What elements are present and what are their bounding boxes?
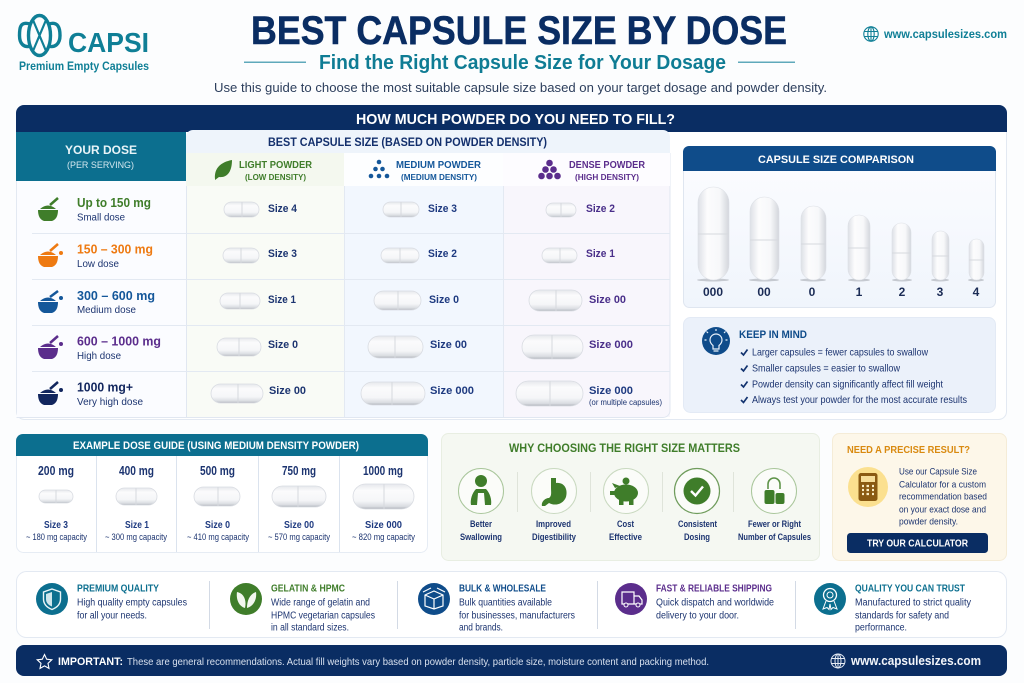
icon: leaf (215, 160, 232, 180)
row: 600-1000 mg: 600 – 1000 mg (77, 334, 161, 348)
example: 400 mg: Size 1 (125, 519, 149, 531)
panel: keep in mind: KEEP IN MIND (739, 329, 807, 341)
icon: bowl blue (38, 291, 63, 313)
panel: benefits (16, 572, 1006, 638)
footer bar: important note: www.capsulesizes.com (850, 654, 981, 668)
capsule (223, 248, 259, 263)
benefit: bulk and wholesale: BULK & WHOLESALE (459, 584, 546, 594)
reason: improved digestibility: Digestibility (532, 532, 576, 542)
reason: consistent dosing: Dosing (684, 532, 710, 542)
icon: bowl green (38, 198, 58, 221)
row: 300-600 mg: 300 – 600 mg (77, 289, 155, 303)
logo: CAPSI (19, 16, 149, 73)
column: medium powder: MEDIUM POWDER (396, 160, 482, 171)
reason: better swallowing (458, 468, 504, 542)
example: 750 mg: Size 00 (284, 519, 314, 531)
row: 600-1000 mg: Size 000 (589, 339, 633, 351)
reason: better swallowing: Swallowing (460, 532, 502, 542)
row: 150-300 mg: Size 2 (428, 248, 457, 260)
icon: stomach (542, 478, 567, 506)
comparison size labels: 3 (937, 285, 944, 299)
panel: need a precise result (832, 434, 1006, 560)
column: light powder (186, 153, 344, 186)
benefit: premium quality: High quality empty capsules (77, 598, 187, 608)
row: 1000 mg+ (38, 380, 662, 408)
capsule (516, 381, 583, 406)
calculator text: recommendation based (899, 492, 987, 502)
icon: leaves (230, 583, 262, 615)
footer bar: important note (16, 645, 1007, 676)
reason: cost effective: Effective (609, 532, 642, 542)
capsule (361, 382, 425, 405)
example: 200 mg: Size 3 (44, 519, 68, 531)
vertical capsules (697, 187, 984, 282)
icon: bottles (764, 478, 784, 504)
checklist: Larger capsules = fewer capsules to swallow (752, 348, 929, 358)
icon: shield (36, 583, 68, 615)
row: up to 150 mg: Size 2 (586, 203, 615, 215)
benefit: bulk and wholesale: for businesses, manufacturers (459, 610, 575, 622)
capsule (529, 290, 582, 311)
row: up to 150 mg: Up to 150 mg (77, 196, 151, 210)
capsule (522, 335, 583, 359)
footer bar: important note: IMPORTANT: (58, 656, 123, 668)
checklist: Smaller capsules = easier to swallow (752, 364, 901, 374)
reason: right number of capsules: Fewer or Right (748, 519, 801, 529)
calculator text: Calculator for a custom (899, 480, 986, 490)
icon: light bulb (702, 327, 730, 355)
example: 1000 mg: Size 000 (365, 519, 402, 531)
benefit: premium quality (36, 583, 187, 622)
example: 400 mg: 400 mg (119, 464, 154, 478)
benefit: premium quality: for all your needs. (77, 610, 147, 622)
reason: better swallowing: Better (470, 519, 492, 529)
main header (16, 105, 1007, 132)
panel: keep in mind (684, 318, 996, 412)
checklist: Powder density can significantly affect fill weight (752, 380, 943, 390)
row: 300-600 mg (38, 289, 626, 316)
example: 400 mg (105, 464, 167, 542)
button: try our calculator: TRY OUR CALCULATOR (867, 538, 969, 550)
example: 750 mg: 750 mg (282, 464, 316, 478)
example: 200 mg: ~ 180 mg capacity (26, 532, 87, 542)
comparison size labels (703, 285, 980, 299)
row: 1000 mg+: Size 000 (589, 385, 633, 397)
benefit: bulk and wholesale: and brands. (459, 622, 503, 634)
row: 150-300 mg: Size 1 (586, 248, 615, 260)
comparison size labels: 1 (856, 285, 863, 299)
column: light powder: (LOW DENSITY) (245, 172, 306, 182)
icon: bowl purple (38, 336, 63, 359)
benefit: premium quality: PREMIUM QUALITY (77, 584, 159, 594)
row: 150-300 mg: Low dose (77, 259, 119, 270)
row: up to 150 mg: Size 3 (428, 203, 457, 215)
benefit: quality you can trust: standards for safety and (855, 610, 949, 622)
capsule (220, 293, 260, 309)
capsule (383, 202, 419, 217)
your dose heading: YOUR DOSE (65, 143, 137, 157)
row: 600-1000 mg: Size 00 (430, 339, 467, 351)
example: 750 mg: ~ 570 mg capacity (268, 532, 330, 542)
capsule (374, 291, 421, 310)
reason: cost effective: Cost (617, 519, 634, 529)
benefit: quality you can trust: performance. (855, 622, 907, 634)
example: 200 mg (26, 464, 87, 542)
comparison heading (683, 146, 996, 171)
panel: need a precise result: NEED A PRECISE RESULT? (847, 444, 970, 456)
icon: bowl navy (38, 382, 63, 405)
your dose heading (16, 132, 186, 181)
button: try our calculator (847, 533, 988, 553)
benefit: quality you can trust: QUALITY YOU CAN TRUST (855, 584, 965, 594)
column: medium powder (344, 153, 503, 186)
panel: capsule size comparison (683, 146, 996, 308)
example: 1000 mg: ~ 820 mg capacity (352, 532, 415, 542)
calculator text: powder density. (899, 516, 958, 528)
icon: check badge (684, 478, 710, 504)
footer bar: important note: These are general recommendations. Actual fill weights vary based on powder density, particle size, moisture content and packing method. (127, 657, 709, 668)
panel: why choosing the right size matters: WHY CHOOSING THE RIGHT SIZE MATTERS (509, 441, 740, 455)
row: 1000 mg+: Very high dose (77, 397, 143, 408)
your dose heading: (PER SERVING) (67, 160, 134, 171)
website link top: www.capsulesizes.com (883, 29, 1007, 41)
best capsule heading: BEST CAPSULE SIZE (BASED ON POWDER DENSITY) (268, 137, 547, 149)
reason: improved digestibility: Improved (536, 519, 571, 529)
checklist (741, 348, 967, 406)
intro text: Use this guide to choose the most suitable capsule size based on your target dosage and powder density. (214, 80, 827, 95)
comparison heading: CAPSULE SIZE COMPARISON (758, 154, 914, 166)
main header: HOW MUCH POWDER DO YOU NEED TO FILL? (356, 111, 675, 128)
example: 500 mg: ~ 410 mg capacity (187, 532, 249, 542)
row: 1000 mg+: (or multiple capsules) (589, 398, 662, 407)
example: 200 mg: 200 mg (38, 464, 74, 478)
capsule (368, 336, 423, 358)
example: 750 mg (268, 464, 330, 542)
example: 1000 mg (352, 464, 415, 542)
benefit: bulk and wholesale: Bulk quantities available (459, 598, 552, 608)
capsule (217, 338, 261, 356)
row: 300-600 mg: Size 1 (268, 294, 296, 306)
reason: consistent dosing (674, 468, 720, 542)
capsule (546, 203, 576, 217)
calculator text (899, 466, 987, 528)
icon: truck (615, 583, 647, 615)
subtitle: Find the Right Capsule Size for Your Dosage (319, 52, 726, 74)
column: medium powder: (MEDIUM DENSITY) (401, 172, 477, 182)
icon: star (37, 654, 52, 668)
comparison size labels: 0 (809, 285, 816, 299)
comparison size labels: 4 (973, 285, 980, 299)
dose table (16, 130, 670, 418)
row: 150-300 mg: Size 3 (268, 248, 297, 260)
example heading: EXAMPLE DOSE GUIDE (USING MEDIUM DENSITY POWDER) (73, 440, 359, 452)
icon: bowl orange (38, 244, 63, 267)
row: 1000 mg+: Size 00 (269, 385, 306, 397)
benefit: quality you can trust: Manufactured to strict quality (855, 598, 971, 608)
column: dense powder: DENSE POWDER (569, 160, 646, 171)
benefit: fast shipping: delivery to your door. (656, 610, 739, 622)
benefit: gelatin and hpmc: Wide range of gelatin and (271, 598, 370, 608)
column: dense powder: (HIGH DENSITY) (575, 172, 639, 182)
row: 150-300 mg (38, 242, 615, 270)
logo: CAPSI: Premium Empty Capsules (19, 61, 149, 73)
benefit: gelatin and hpmc: HPMC vegetarian capsules (271, 610, 375, 622)
example: 500 mg (187, 464, 249, 542)
row: up to 150 mg: Small dose (77, 212, 125, 224)
column: dense powder (503, 153, 670, 186)
example: 400 mg: ~ 300 mg capacity (105, 532, 167, 542)
capsule (542, 248, 577, 263)
icon: globe (831, 654, 845, 668)
icon: person (471, 475, 491, 505)
icon: box (418, 583, 450, 615)
icon: logo mark (20, 16, 60, 56)
benefit: gelatin and hpmc: in all standard sizes. (271, 622, 349, 634)
icon: dots (369, 160, 389, 178)
best capsule heading (186, 130, 670, 153)
benefit: bulk and wholesale (418, 583, 575, 634)
column: light powder: LIGHT POWDER (239, 160, 313, 171)
benefit: fast shipping: FAST & RELIABLE SHIPPING (656, 584, 772, 594)
row: 300-600 mg: Size 0 (429, 294, 459, 306)
reason: cost effective (604, 468, 648, 542)
website link top (864, 27, 1007, 41)
example: 500 mg: 500 mg (200, 464, 235, 478)
panel: why choosing the right size matters (442, 434, 820, 560)
row: 300-600 mg: Size 00 (589, 294, 626, 306)
title: BEST CAPSULE SIZE BY DOSE (251, 9, 787, 53)
reason: consistent dosing: Consistent (678, 519, 717, 529)
row: 300-600 mg: Medium dose (77, 305, 136, 316)
icon: piggy bank (610, 478, 638, 505)
row: up to 150 mg: Size 4 (268, 203, 298, 215)
reason: right number of capsules (738, 468, 811, 542)
icon: globe (864, 27, 878, 41)
capsule (211, 384, 263, 403)
icon: calculator (848, 467, 888, 507)
capsule (224, 202, 259, 217)
reason: right number of capsules: Number of Capsules (738, 532, 811, 542)
calculator text: on your exact dose and (899, 504, 986, 516)
benefit: gelatin and hpmc: GELATIN & HPMC (271, 584, 345, 594)
row: 600-1000 mg: High dose (77, 351, 121, 362)
benefit: quality you can trust (814, 583, 971, 634)
calculator text: Use our Capsule Size (899, 466, 977, 478)
benefit: fast shipping: Quick dispatch and worldwide (656, 598, 774, 608)
logo: CAPSI: CAPSI (68, 27, 149, 58)
example: 1000 mg: 1000 mg (363, 464, 403, 478)
icon: dense dots (538, 160, 561, 179)
row: up to 150 mg (38, 196, 615, 224)
benefit: gelatin and hpmc (230, 583, 375, 634)
reason: improved digestibility (532, 468, 576, 542)
icon: award rosette (814, 583, 846, 615)
comparison size labels: 00 (757, 285, 771, 299)
row: 600-1000 mg (38, 334, 633, 362)
row: 1000 mg+: Size 000 (430, 385, 474, 397)
panel: example dose guide (16, 434, 428, 552)
row: 600-1000 mg: Size 0 (268, 339, 298, 351)
checklist: Always test your powder for the most accurate results (752, 395, 967, 406)
row: 150-300 mg: 150 – 300 mg (77, 242, 153, 256)
comparison size labels: 000 (703, 285, 723, 299)
capsule (381, 248, 419, 263)
example heading (16, 434, 428, 456)
example: 500 mg: Size 0 (205, 519, 230, 531)
benefit: fast shipping (615, 583, 774, 622)
row: 1000 mg+: 1000 mg+ (77, 380, 133, 394)
comparison size labels: 2 (899, 285, 906, 299)
